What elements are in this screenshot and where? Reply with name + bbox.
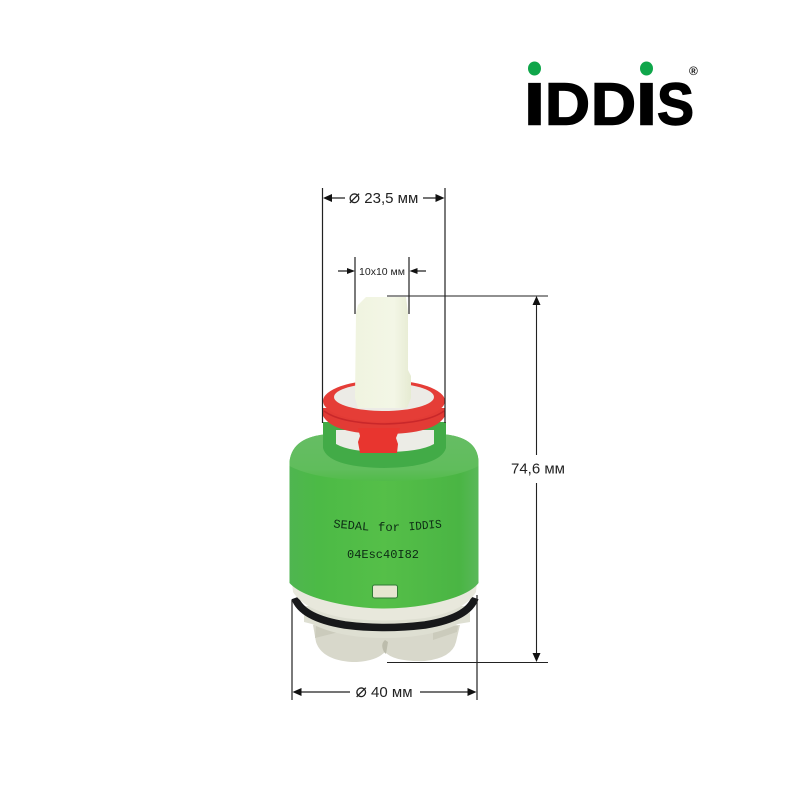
cartridge product photo — [290, 297, 478, 662]
logo: IDDIS: I — [524, 72, 545, 138]
white stem — [355, 297, 411, 408]
engraved markings: IDDIS — [408, 518, 442, 534]
dimension: 74.6 mm height — [387, 296, 565, 662]
lower flange — [304, 606, 470, 638]
inner white ring — [336, 430, 434, 452]
engraved markings: 04Esc40I82 — [347, 548, 419, 562]
engraved markings: for — [378, 521, 400, 535]
red top ring — [323, 380, 445, 422]
engraved markings — [333, 517, 442, 562]
small slot — [372, 585, 398, 598]
grey feet — [313, 625, 460, 662]
green collar — [323, 422, 446, 468]
dimension: 40 mm diameter — [292, 595, 477, 702]
green body — [290, 434, 478, 608]
logo: IDDIS — [524, 62, 698, 138]
O-ring — [295, 598, 475, 628]
red lower ring — [323, 408, 445, 434]
dimension: 74.6 mm height: 74,6 мм — [511, 460, 565, 478]
dimension: 10x10 mm square: 10x10 мм — [359, 266, 405, 278]
logo: IDDIS: ® — [689, 64, 698, 78]
red tab — [358, 428, 400, 453]
logo: IDDIS: I — [636, 72, 657, 138]
cream base ring — [292, 582, 477, 620]
logo: IDDIS: D — [591, 72, 636, 138]
logo: IDDIS: D — [545, 72, 590, 138]
red ring groove — [324, 411, 444, 424]
logo: IDDIS: S — [657, 72, 694, 138]
dimension: 10x10 mm square — [338, 257, 426, 314]
dimension: 23.5 mm diameter — [322, 186, 445, 423]
dimension: 40 mm diameter: ⌀ 40 мм — [355, 680, 413, 702]
engraved markings: SEDAL — [333, 517, 370, 535]
body top surface — [290, 434, 478, 481]
dimension: 23.5 mm diameter: ⌀ 23,5 мм — [349, 186, 418, 208]
